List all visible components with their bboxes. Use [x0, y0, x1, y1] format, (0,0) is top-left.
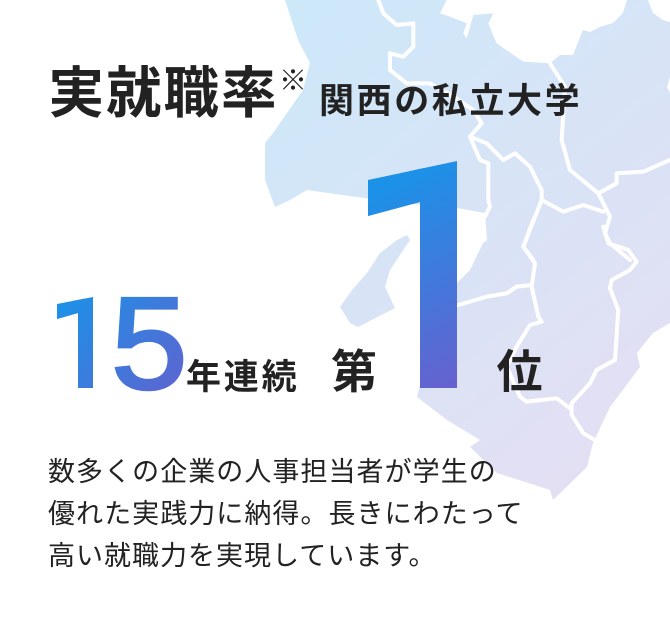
body text: 高い就職力を実現しています。: [48, 541, 436, 571]
body text: 優れた実践力に納得。長きにわたって: [48, 499, 524, 529]
number: 15: 5: [111, 270, 188, 417]
body text: [48, 457, 524, 571]
map: lake and northern bay: [440, 0, 627, 63]
number: 1: 1: [340, 98, 518, 456]
map: Awaji island: [340, 235, 410, 327]
number: 15: [57, 296, 184, 392]
map: land area: [265, 0, 670, 500]
map: prefecture borders: [378, 0, 670, 440]
label: 年連続: 年連続: [186, 358, 299, 397]
label: 第: 第: [331, 346, 377, 398]
subtitle: 関西の私立大学: 関西の私立大学: [319, 82, 582, 121]
title: 実就職率: 実就職率: [48, 62, 279, 124]
body text: 数多くの企業の人事担当者が学生の: [48, 457, 497, 487]
footnote mark: ※: [279, 65, 307, 96]
map of Kansai region: [265, 0, 670, 500]
number: 15: 1: [45, 270, 117, 416]
label: 位: 位: [496, 346, 542, 398]
